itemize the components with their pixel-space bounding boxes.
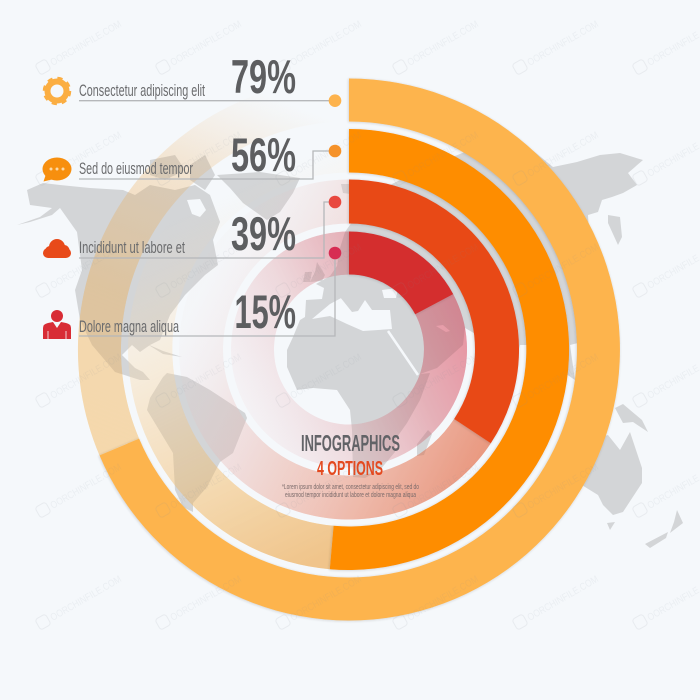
subheading: 4 OPTIONS (317, 458, 383, 480)
leader line (79, 100, 330, 102)
ring: 15 percent (349, 232, 453, 314)
dot (329, 247, 341, 259)
map: tasmania (607, 522, 615, 530)
watermarks: OORCHINFILE.COM (406, 352, 481, 402)
watermarks: OORCHINFILE.COM (169, 462, 244, 512)
watermarks: OORCHINFILE.COM (49, 130, 124, 180)
row: 15 percent (43, 247, 341, 339)
watermarks: OORCHINFILE.COM (289, 574, 364, 624)
track veil: outer (78, 78, 349, 455)
row: 79 percent (44, 50, 341, 107)
watermarks: OORCHINFILE.COM (526, 130, 601, 180)
watermarks: OORCHINFILE.COM (289, 130, 364, 180)
label: incididunt: Incididunt ut labore et (79, 239, 185, 257)
track veil: third (179, 180, 491, 520)
map: north america (17, 183, 220, 380)
label: dolore: Dolore magna aliqua (79, 318, 180, 336)
map: madagascar (417, 430, 432, 456)
map: svalbard (341, 184, 350, 194)
watermarks: OORCHINFILE.COM (406, 462, 481, 512)
icon: speech bubble (42, 158, 72, 182)
icon: cloud (43, 239, 71, 258)
leader line (79, 259, 335, 336)
dot (329, 145, 341, 157)
value: 39%: 39% (231, 207, 296, 260)
value: 79%: 79% (231, 50, 296, 103)
map: new guinea (615, 404, 648, 432)
track: inner (231, 232, 467, 468)
ring: 39 percent (349, 180, 519, 443)
watermarks: OORCHINFILE.COM (169, 242, 244, 292)
watermarks: OORCHINFILE.COM (169, 574, 244, 624)
icon: gear (44, 78, 70, 104)
map: british isles (303, 262, 325, 282)
row: 56 percent (42, 128, 341, 182)
icon: person (43, 310, 71, 339)
map: hudson bay (187, 199, 206, 217)
track: outer (78, 78, 349, 455)
watermarks: OORCHINFILE.COM (289, 242, 364, 292)
map: mediterranean sea (312, 297, 392, 331)
watermarks: OORCHINFILE.COM (169, 19, 244, 69)
watermarks: OORCHINFILE.COM (526, 462, 601, 512)
leader line (79, 151, 330, 179)
watermarks: OORCHINFILE.COM (526, 574, 601, 624)
track veil: second (128, 129, 349, 569)
map: italy (340, 290, 358, 312)
watermarks: OORCHINFILE.COM (49, 19, 124, 69)
map: sakhalin and japan (608, 215, 622, 245)
track: third (179, 180, 491, 520)
watermarks: OORCHINFILE.COM (406, 130, 481, 180)
watermarks: OORCHINFILE.COM (289, 19, 364, 69)
map: cuba (147, 344, 182, 357)
caption line two: eiusmod tempor incididunt ut labore et dolore magna aliqua (285, 492, 416, 499)
dot (329, 94, 341, 107)
track: second (128, 129, 349, 569)
watermarks: OORCHINFILE.COM (406, 574, 481, 624)
map: greenland (217, 172, 300, 220)
watermarks: OORCHINFILE.COM (526, 352, 601, 402)
watermarks: OORCHINFILE.COM (289, 352, 364, 402)
solid percentage rings (100, 78, 620, 620)
leader line (79, 202, 330, 258)
map: africa and eurasia (287, 140, 643, 478)
watermarks: OORCHINFILE.COM (169, 130, 244, 180)
heading: INFOGRAPHICS (301, 430, 400, 456)
watermarks: OORCHINFILE.COM (289, 462, 364, 512)
value: 15%: 15% (234, 285, 296, 338)
map: australia (575, 432, 642, 515)
row: 39 percent (43, 196, 341, 260)
watermarks: OORCHINFILE.COM (406, 242, 481, 292)
faded track rings (78, 78, 491, 569)
map: south america (147, 373, 247, 512)
watermarks: OORCHINFILE.COM (169, 352, 244, 402)
watermarks: OORCHINFILE.COM (49, 352, 124, 402)
track veil: inner (231, 232, 467, 468)
world map (17, 140, 683, 548)
watermarks: OORCHINFILE.COM (406, 19, 481, 69)
value: 56%: 56% (231, 128, 296, 181)
map: arctic islands (150, 155, 215, 190)
dot (329, 196, 341, 208)
ring: 56 percent (330, 129, 569, 570)
watermarks: OORCHINFILE.COM (49, 242, 124, 292)
watermarks: OORCHINFILE.COM (49, 574, 124, 624)
label: consectetur: Consectetur adipiscing elit (79, 82, 205, 100)
watermarks: OORCHINFILE.COM (526, 242, 601, 292)
caption line one: *Lorem ipsum dolor sit amet, consectetur adipiscing elit, sed do (282, 484, 419, 491)
map: persian gulf (436, 325, 450, 332)
map: new zealand (645, 510, 683, 548)
map: red sea (388, 331, 418, 375)
watermarks: OORCHINFILE.COM (49, 462, 124, 512)
label: sed do: Sed do eiusmod tempor (79, 160, 193, 178)
center title block (282, 430, 419, 499)
watermarks: OORCHINFILE.COM (526, 19, 601, 69)
ring: 79 percent (100, 78, 620, 620)
map: black sea (382, 288, 398, 298)
